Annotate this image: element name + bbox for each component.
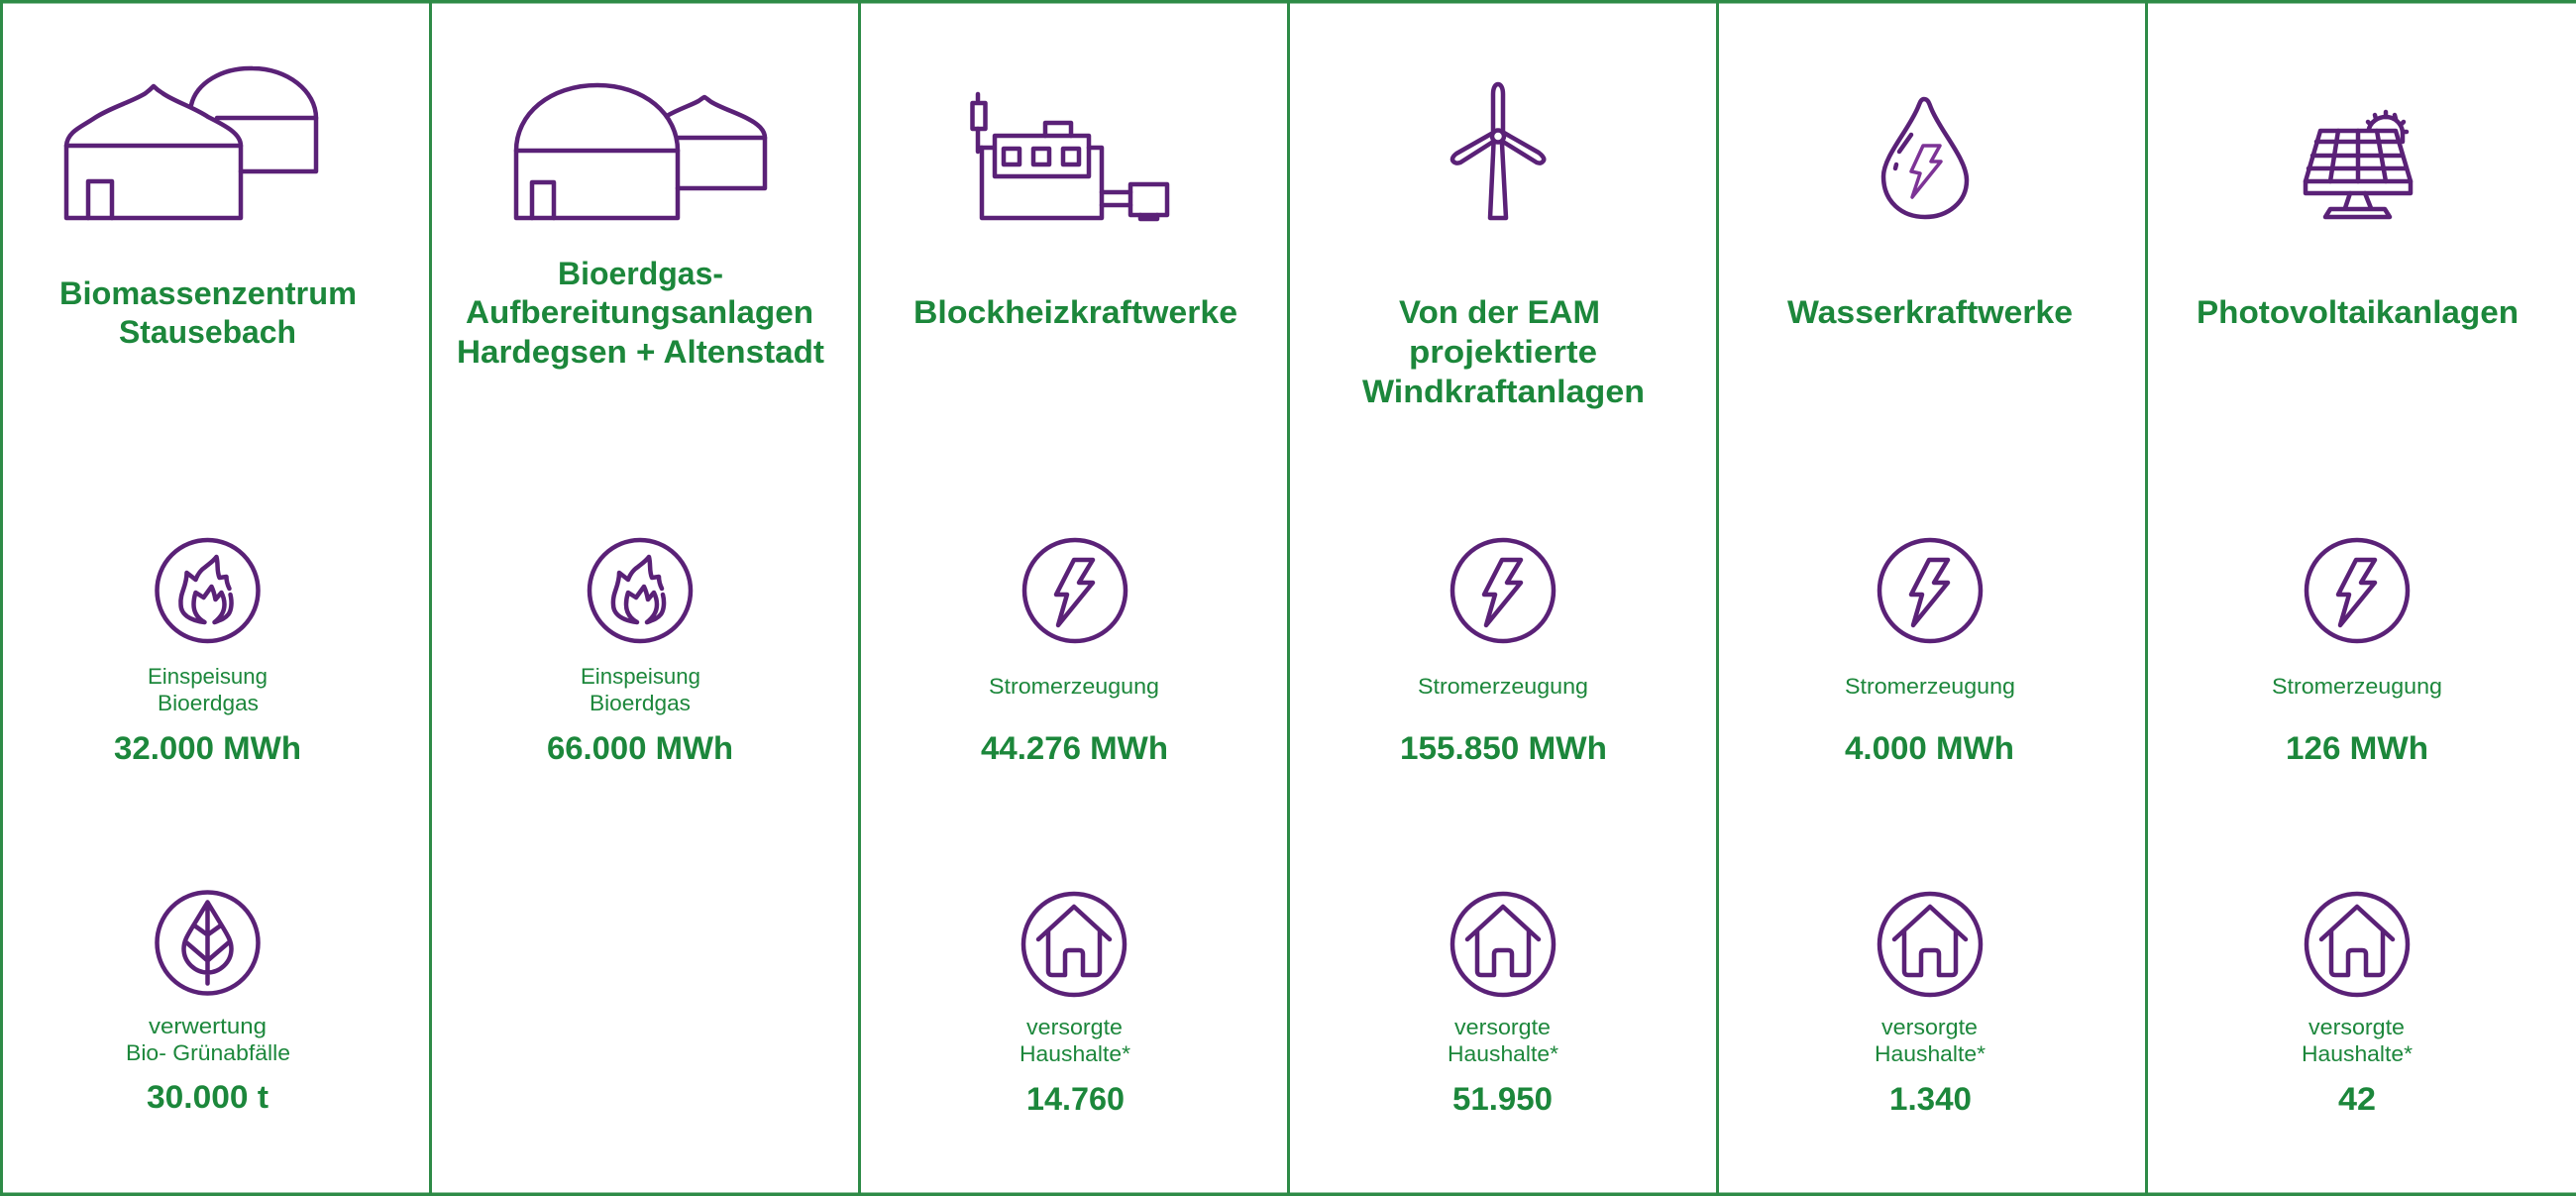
value: 4.000 MWh [1845,730,2014,766]
value: 126 MWh [2286,730,2428,766]
heading: Bioerdgas- [558,256,723,291]
value: 14.760 [1026,1081,1125,1117]
heading: Hardegsen + Altenstadt [457,334,824,370]
icon: lightning bolt [1452,540,1554,641]
label: Bioerdgas [590,691,691,715]
value: 42 [2338,1081,2376,1117]
value: 51.950 [1452,1081,1553,1117]
panel: Wasserkraftwerke [1717,0,2146,1196]
label [148,664,268,715]
icon: flame [590,540,691,641]
label: Einspeisung [581,664,700,689]
icon: leaf [157,892,258,993]
label [1448,1015,1558,1066]
label: Stromerzeugung [1418,674,1588,699]
icon: solar panel with sun [2306,112,2411,217]
icon: water drop with bolt [1883,99,1967,217]
value: 155.850 MWh [1400,730,1607,766]
heading: Wasserkraftwerke [1787,294,2073,330]
label: Haushalte* [1875,1041,1986,1066]
label: versorgte [1026,1015,1123,1039]
label: versorgte [1881,1015,1978,1039]
value: 44.276 MWh [981,730,1168,766]
heading: Aufbereitungsanlagen [466,294,813,330]
label: Einspeisung [148,664,268,689]
heading [59,275,357,350]
heading [457,256,824,370]
icon: house [1023,894,1125,995]
label: Bioerdgas [158,691,259,715]
label [1020,1015,1130,1066]
label: Stromerzeugung [2272,674,2442,699]
value: 32.000 MWh [114,730,301,766]
label [581,664,700,715]
panel: Blockheizkraftwerke [859,0,1288,1196]
panel: Windkraftanlagen [1288,0,1717,1196]
label: Haushalte* [1448,1041,1558,1066]
label: Haushalte* [1020,1041,1130,1066]
label: Haushalte* [2302,1041,2413,1066]
icon: house [2307,894,2408,995]
value: 30.000 t [147,1079,268,1115]
icon: lightning bolt [1024,540,1126,641]
label: verwertung [149,1014,267,1038]
heading: Biomassenzentrum [59,275,357,311]
label: versorgte [1454,1015,1551,1039]
label [126,1014,290,1065]
icon: house [1452,894,1554,995]
value: 1.340 [1889,1081,1972,1117]
icon: biogas upgrading plant [516,85,765,218]
heading: Windkraftanlagen [1362,374,1645,409]
icon: flame [157,540,258,641]
label: Stromerzeugung [989,674,1159,699]
panel: Photovoltaikanlagen [2146,0,2576,1196]
panel: Bioerdgas-Aufbereitungsanlagen [430,0,859,1196]
label: versorgte [2308,1015,2405,1039]
label: Stromerzeugung [1845,674,2015,699]
icon: biomass plant [66,68,316,218]
panel: Biomassenzentrum Stausebach [0,0,430,1196]
heading: Blockheizkraftwerke [913,294,1237,330]
heading: Photovoltaikanlagen [2197,294,2519,330]
heading: Von der EAM [1399,294,1600,330]
label: Bio- Grünabfälle [126,1040,290,1065]
value: 66.000 MWh [547,730,733,766]
heading: Stausebach [119,314,296,350]
icon: lightning bolt [1879,540,1981,641]
heading [1362,294,1645,409]
icon: wind turbine [1452,84,1544,218]
label [1875,1015,1986,1066]
icon: house [1879,894,1981,995]
icon: combined heat and power unit [973,94,1167,219]
heading: projektierte [1409,334,1597,370]
icon: lightning bolt [2307,540,2408,641]
label [2302,1015,2413,1066]
